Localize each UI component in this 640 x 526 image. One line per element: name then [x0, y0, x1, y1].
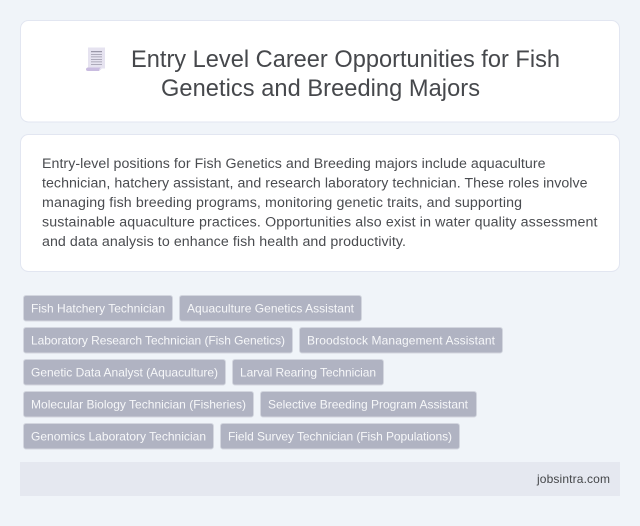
text block: description: managing fish breeding programs, monitoring genetic traits, and supporting	[42, 195, 522, 211]
footer bar	[20, 462, 620, 496]
tag: Genomics Laboratory Technician: Genomics Laboratory Technician	[31, 430, 206, 444]
tag: Field Survey Technician (Fish Populations): Field Survey Technician (Fish Populations)	[228, 430, 452, 444]
tag: Fish Hatchery Technician: Fish Hatchery Technician	[31, 302, 165, 316]
tag: Molecular Biology Technician (Fisheries)	[24, 392, 254, 417]
tag: Aquaculture Genetics Assistant: Aquaculture Genetics Assistant	[187, 302, 355, 316]
title	[131, 47, 560, 102]
tag: Selective Breeding Program Assistant	[260, 392, 476, 417]
tag list: career roles	[24, 296, 502, 449]
panel: header card	[20, 20, 620, 122]
text block: description: Entry-level positions for Fish Genetics and Breeding majors include aquaculture	[42, 156, 546, 172]
tag: Molecular Biology Technician (Fisheries): Molecular Biology Technician (Fisheries)	[31, 398, 246, 412]
tag: Aquaculture Genetics Assistant	[180, 296, 362, 321]
title: Entry Level Career Opportunities for Fish	[131, 47, 560, 73]
tag: Larval Rearing Technician: Larval Rearing Technician	[240, 366, 376, 380]
footer text: source: jobsintra.com	[536, 472, 610, 486]
text block: description: sustainable aquaculture practices. Opportunities also exist in water quality assessment	[42, 214, 598, 230]
tag: Larval Rearing Technician	[232, 360, 384, 385]
panel: description card	[20, 134, 620, 272]
text block: description	[42, 156, 598, 250]
tag: Genetic Data Analyst (Aquaculture): Genetic Data Analyst (Aquaculture)	[31, 366, 218, 380]
tag: Field Survey Technician (Fish Populations)	[220, 424, 460, 449]
tag: Selective Breeding Program Assistant: Selective Breeding Program Assistant	[268, 398, 469, 412]
tag: Laboratory Research Technician (Fish Genetics): Laboratory Research Technician (Fish Genetics)	[31, 334, 285, 348]
tag: Laboratory Research Technician (Fish Genetics)	[24, 328, 292, 353]
text block: description: technician, hatchery assistant, and research laboratory technician. These roles involve	[42, 176, 588, 192]
text block: description: and data analysis to enhance fish health and productivity.	[42, 234, 406, 250]
title: Genetics and Breeding Majors	[161, 76, 480, 102]
tag: Fish Hatchery Technician	[24, 296, 172, 321]
tag: Genomics Laboratory Technician	[24, 424, 214, 449]
tag: Genetic Data Analyst (Aquaculture)	[24, 360, 226, 385]
icon: scroll document	[86, 48, 105, 71]
tag: Broodstock Management Assistant	[300, 328, 502, 353]
tag: Broodstock Management Assistant: Broodstock Management Assistant	[307, 334, 496, 348]
